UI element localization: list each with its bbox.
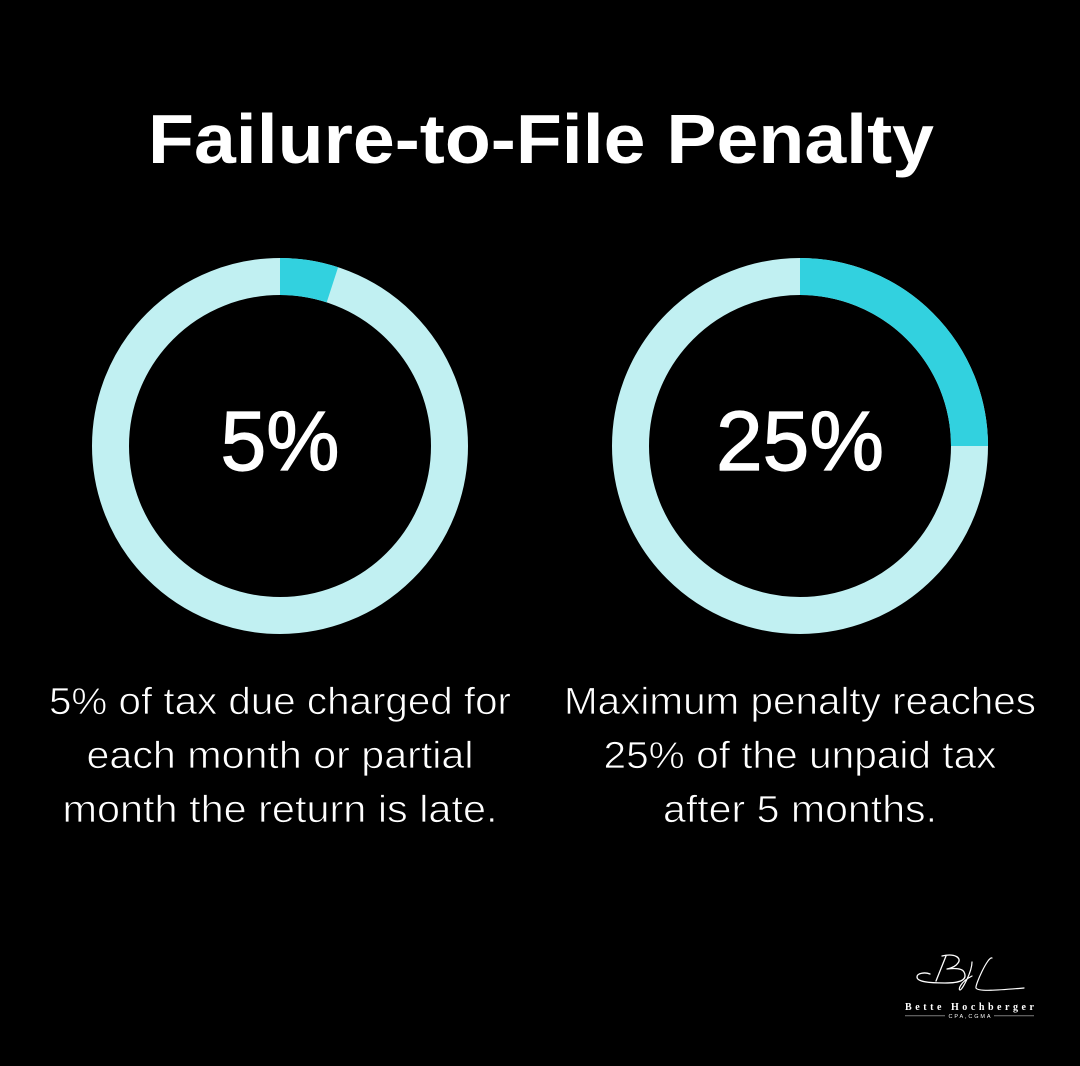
logo name: Bette Hochberger xyxy=(905,1002,1035,1013)
text block: 25% description: after 5 months. xyxy=(663,789,937,831)
value: 5%: 5% xyxy=(220,394,340,488)
text block: 25% description xyxy=(564,681,1036,831)
value: 25%: 25% xyxy=(716,394,884,488)
text block: 5% description: month the return is late. xyxy=(62,789,498,831)
text block: 5% description xyxy=(49,681,511,831)
text block: 25% description: 25% of the unpaid tax xyxy=(604,735,996,777)
donut chart: 5% xyxy=(110,258,450,616)
text block: 5% description: 5% of tax due charged for xyxy=(49,681,511,723)
text block: 5% description: each month or partial xyxy=(86,735,474,777)
donut chart: 25% xyxy=(630,258,988,616)
title: Failure-to-File Penalty xyxy=(148,100,934,178)
logo: Bette Hochberger signature xyxy=(905,955,1035,1020)
text block: 25% description: Maximum penalty reaches xyxy=(564,681,1036,723)
logo credentials: CPA,CGMA xyxy=(948,1014,991,1020)
